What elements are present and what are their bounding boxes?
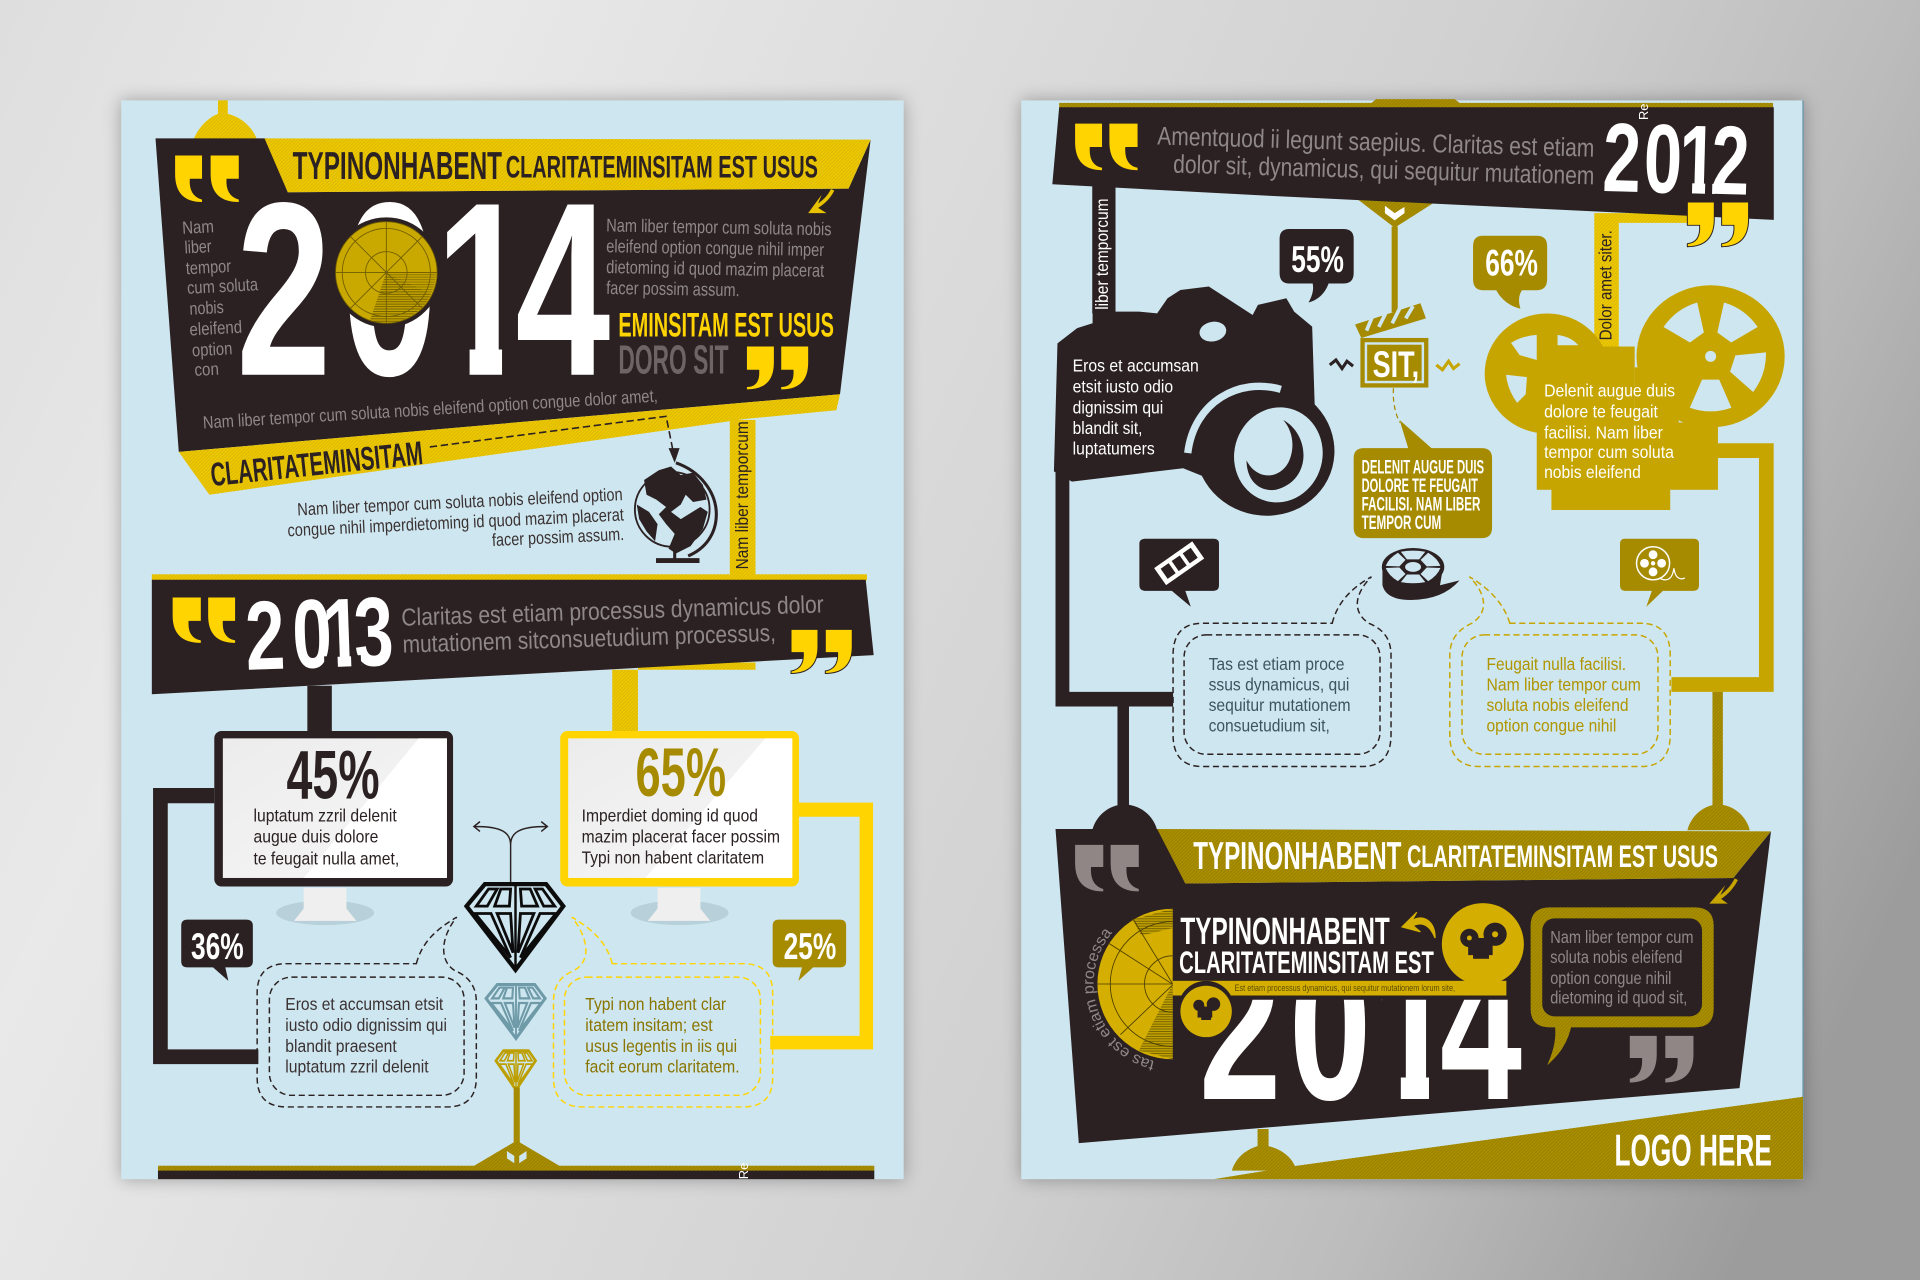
right text block: facer possim assum. — [606, 277, 740, 300]
dashed bubble left: Eros et accumsan etsit — [285, 994, 443, 1014]
yellow lower band — [179, 394, 840, 495]
dashed bubble right — [1450, 577, 1670, 767]
bubble 66% — [1473, 236, 1547, 309]
yellow strip: Est etiam processus dynamicus, qui sequitur mutationem lorum site, — [1235, 983, 1455, 993]
camera text: blandit sit, — [1073, 418, 1142, 438]
panel: right page — [1012, 91, 1813, 1189]
inner title: TYPINONHABENT — [1180, 911, 1390, 953]
arrow — [808, 190, 833, 213]
monitor text: Imperdiet doming id quod — [582, 806, 758, 826]
globe paragraph — [287, 484, 625, 550]
lower big year: 2014 — [1199, 908, 1522, 1144]
camera text — [1073, 356, 1199, 458]
vertical stem with label: Nam liber temporcum — [732, 421, 752, 569]
icon: projector badge large — [1442, 903, 1524, 985]
left column text: option — [191, 338, 233, 360]
inner title — [1179, 911, 1434, 980]
callout: delenit: TEMPOR CUM — [1362, 512, 1441, 534]
speech bubble: dietoming id quod sit, — [1550, 987, 1687, 1007]
big year 2014: 2014 — [236, 152, 610, 428]
globe paragraph: facer possim assum. — [491, 524, 625, 550]
dashed bubble left: ssus dynamicus, qui — [1209, 675, 1349, 695]
split arrow — [474, 822, 547, 884]
stat 65%: 65% — [636, 734, 726, 811]
right yellow connector — [770, 803, 873, 1049]
camera text: dignissim qui — [1073, 397, 1163, 417]
right text block: Nam liber tempor cum soluta nobis — [606, 214, 832, 239]
monitor text: Typi non habent claritatem — [582, 847, 764, 867]
dashed bubble right: usus legentis in iis qui — [585, 1036, 737, 1056]
icon: closing quote gray — [1630, 1036, 1693, 1082]
gold footer wedge — [1214, 1097, 1803, 1179]
left column text: con — [194, 359, 219, 380]
banner text: Amentquod ii legunt saepius. Claritas est etiam — [1157, 123, 1595, 163]
left column text: liber — [184, 236, 212, 257]
yellow stem with label — [1594, 213, 1687, 347]
dark stem with label: liber temporcum — [1092, 198, 1112, 310]
icon: camera — [1054, 287, 1349, 531]
slanted label: CLARITATEMINSITAM — [209, 435, 425, 494]
panel: monitor 45% — [214, 731, 453, 887]
globe paragraph: congue nihil imperdietoming id quod mazim placerat — [287, 504, 624, 540]
film strip bubble — [1139, 539, 1219, 607]
speech bubble: option congue nihil — [1550, 968, 1671, 988]
bubble 25% — [773, 920, 846, 981]
left dark connector — [153, 788, 258, 1064]
dashed bubble left: Tas est etiam proce — [1209, 654, 1345, 674]
panel: 2012 banner — [1052, 102, 1774, 247]
dashed bubble right: option congue nihil — [1487, 716, 1616, 736]
subheading: EMINSITAM EST USUS — [618, 307, 834, 345]
icon: small reel — [1637, 547, 1685, 580]
banner text: dolor sit, dynamicus, qui sequitur mutationem — [1173, 151, 1595, 190]
dashed bubble right: Typi non habent clar — [585, 994, 726, 1014]
year 2012: 2012 — [1601, 102, 1751, 216]
icon: opening quote — [1075, 124, 1138, 170]
inner title: CLARITATEMINSITAM EST — [1179, 944, 1434, 980]
dark connector lines — [1056, 465, 1173, 808]
dashed bubble left: blandit praesent — [285, 1036, 397, 1056]
dashed bubble right: Feugait nulla facilisi. — [1487, 654, 1626, 674]
callout: delenit: DOLORE TE FEUGAIT — [1362, 475, 1478, 497]
projector text: facilisi. Nam liber — [1544, 422, 1663, 442]
icon: film reel — [1382, 548, 1460, 600]
dashed pointer — [1393, 388, 1400, 422]
bubble 66%: 66% — [1485, 243, 1538, 284]
camera text: etsit iusto odio — [1073, 376, 1173, 396]
bubble 25%: 25% — [784, 926, 836, 967]
reel holes — [1661, 300, 1769, 411]
dashed bubble left: consuetudium sit, — [1209, 716, 1330, 736]
projector text: Delenit augue duis — [1544, 381, 1675, 401]
squiggle arrow left — [1330, 360, 1353, 369]
bubble 55%: 55% — [1291, 239, 1344, 280]
icon: closing quote — [791, 629, 852, 673]
gold heading band — [1157, 829, 1771, 883]
bubble 36% — [181, 920, 253, 981]
left column text: tempor — [185, 256, 232, 278]
left column text: cum soluta — [187, 274, 259, 298]
triangle connector — [1353, 196, 1439, 312]
icon: projector badge small — [1178, 981, 1234, 1037]
projector text — [1544, 381, 1675, 482]
bottom stem and peak — [158, 1087, 874, 1179]
monitor text — [253, 806, 399, 868]
yellow stem with label: Dolor amet siter. — [1595, 230, 1615, 340]
dashed bubble right: facit eorum claritatem. — [585, 1057, 740, 1077]
icon: opening quote — [173, 598, 235, 643]
heading text — [293, 145, 818, 188]
dashed bubble left: luptatum zzril delenit — [285, 1057, 429, 1077]
dark dome — [1092, 804, 1157, 830]
film reel bubble — [1620, 539, 1699, 607]
monitor text: mazim placerat facer possim — [582, 826, 780, 846]
gold connector from projector — [1671, 443, 1774, 692]
curved arrow — [1402, 912, 1435, 938]
icon: film projector — [1485, 285, 1785, 510]
heading text: TYPINONHABENT — [293, 145, 502, 188]
squiggle arrow right — [1436, 361, 1460, 370]
icon: opening quote — [175, 156, 239, 202]
stat 45%: 45% — [287, 736, 380, 813]
banner text — [401, 591, 824, 659]
icon: film strip — [1154, 541, 1204, 585]
heading text: CLARITATEMINSITAM EST USUS — [1407, 838, 1718, 874]
projector text: dolore te feugait — [1544, 402, 1658, 422]
monitor text: luptatum zzril delenit — [253, 806, 397, 826]
dashed pointer to globe — [430, 416, 673, 453]
heading text: TYPINONHABENT — [1193, 835, 1401, 878]
arrow — [1709, 879, 1736, 904]
left column text: eleifend — [189, 317, 243, 340]
icon: medium diamond — [486, 984, 545, 1038]
icon: closing quote — [747, 347, 808, 389]
panel: lower 2014 banner — [1056, 829, 1771, 1144]
speech bubble: soluta nobis eleifend — [1550, 947, 1682, 967]
icon: closing quote — [1687, 202, 1749, 247]
yellow strip — [1173, 981, 1506, 996]
subheading gray: DORO SIT — [618, 336, 729, 382]
heading text — [1193, 835, 1718, 878]
speech bubble — [1531, 907, 1714, 1065]
vertical stem with label — [730, 420, 756, 577]
bottom stem and dome — [1232, 1129, 1297, 1171]
heading text: CLARITATEMINSITAM EST USUS — [506, 149, 818, 185]
gold dome — [1687, 804, 1750, 830]
curved text: tas est etiam processa — [1085, 930, 1154, 1071]
slanted caption: Nam liber tempor cum soluta nobis eleifend option congue dolor amet, — [202, 386, 658, 433]
icon: opening quote gray — [1075, 845, 1139, 891]
banner text — [1157, 123, 1595, 190]
banner text: Claritas est etiam processus dynamicus dolor — [401, 591, 824, 632]
left column text: nobis — [189, 297, 224, 319]
icon: small diamond — [496, 1051, 536, 1090]
dashed bubble left: iusto odio dignissim qui — [285, 1015, 447, 1035]
yellow connector from 2013 band — [612, 662, 756, 732]
top peak and band — [1059, 99, 1773, 108]
logo text: LOGO HERE — [1614, 1127, 1772, 1176]
left column text — [182, 216, 259, 380]
right text block — [606, 214, 832, 300]
callout: delenit — [1354, 420, 1492, 538]
banner text: mutationem sitconsuetudium processus, — [402, 620, 776, 659]
panel: monitor 65% — [560, 731, 799, 887]
projector text: tempor cum soluta — [1544, 442, 1674, 462]
callout: delenit: FACILISI. NAM LIBER — [1362, 494, 1480, 516]
icon: gold disc — [331, 217, 441, 328]
dashed bubble left — [257, 917, 476, 1107]
camera text: luptatumers — [1073, 438, 1155, 458]
monitor text — [582, 806, 780, 867]
camera text: Eros et accumsan — [1073, 356, 1199, 376]
year 2013: 2013 — [243, 578, 395, 692]
dashed bubble right — [553, 917, 773, 1107]
right text block: eleifend option congue nihil imper — [606, 235, 824, 260]
icon: globe — [635, 448, 716, 561]
monitor stand left — [276, 888, 374, 925]
half disc chart — [1097, 908, 1173, 1060]
monitor text: augue duis dolore — [253, 826, 378, 846]
dark connector from 2013 band — [307, 686, 332, 732]
vertical fragment: Re — [1636, 104, 1651, 120]
projector text: nobis eleifend — [1544, 462, 1641, 482]
right text block: dietoming id quod mazim placerat — [606, 256, 824, 281]
bottom stem and peak: Re — [736, 1163, 751, 1179]
panel: 2014 banner — [156, 138, 871, 495]
dashed bubble right: Nam liber tempor cum — [1487, 675, 1641, 695]
left column text: Nam — [182, 216, 214, 238]
yellow dome connector — [193, 100, 257, 140]
lower big year — [1204, 1000, 1522, 1101]
panel: left page — [121, 100, 904, 1179]
yellow heading band — [264, 138, 871, 192]
callout: delenit: DELENIT AUGUE DUIS — [1362, 456, 1484, 478]
monitor text: te feugait nulla amet, — [253, 848, 399, 868]
icon: clapperboard: SIT, — [1373, 344, 1419, 385]
bubble 55% — [1280, 229, 1354, 302]
icon: large diamond — [467, 884, 563, 970]
speech bubble: Nam liber tempor cum — [1550, 927, 1693, 947]
dashed bubble right: itatem insitam; est — [585, 1015, 713, 1035]
dashed bubble left — [1173, 577, 1391, 767]
dashed bubble right: soluta nobis eleifend — [1487, 695, 1629, 715]
dashed bubble left: sequitur mutationem — [1209, 695, 1351, 715]
monitor stand right — [631, 888, 729, 925]
globe paragraph: Nam liber tempor cum soluta nobis eleifend option — [297, 484, 623, 520]
panel: 2013 banner — [152, 574, 874, 694]
bubble 36%: 36% — [191, 926, 244, 967]
icon: clapperboard — [1355, 303, 1428, 388]
gold stem to lower banner — [1712, 692, 1723, 808]
